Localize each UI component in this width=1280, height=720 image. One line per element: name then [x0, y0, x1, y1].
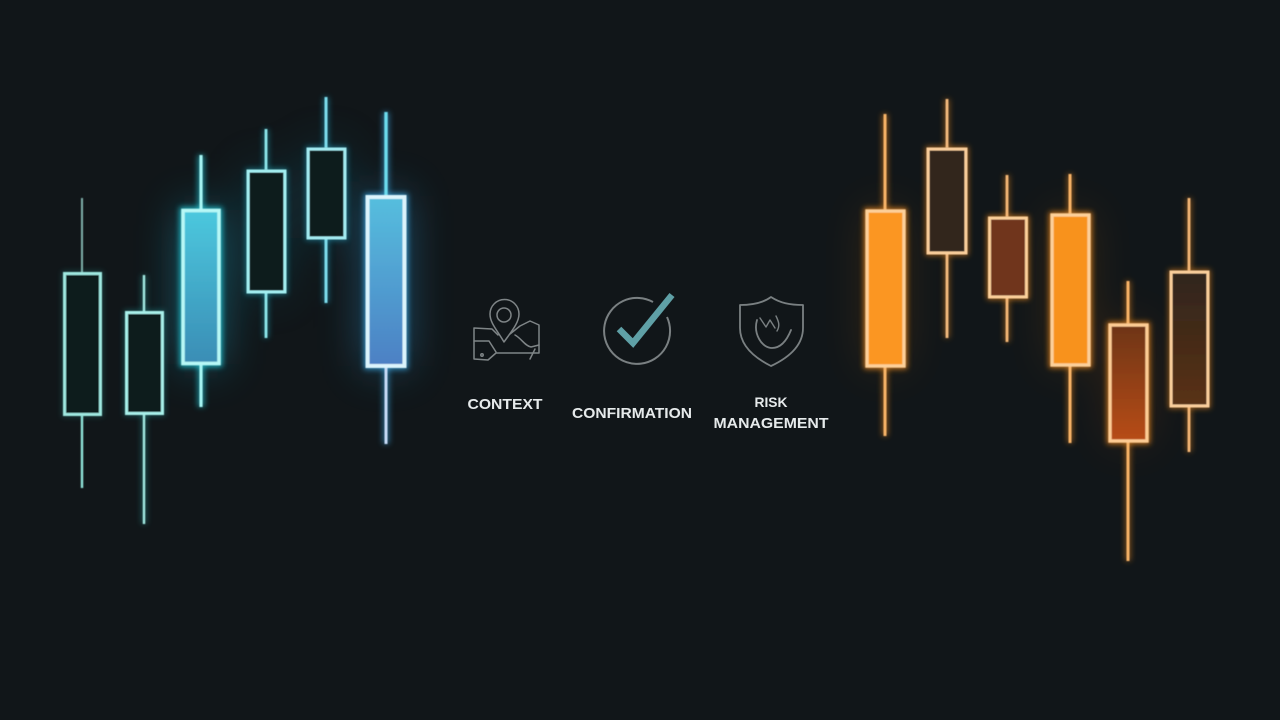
candle 2	[126, 275, 162, 524]
candle 6	[1171, 198, 1208, 452]
label: risk management: RISK	[754, 394, 788, 410]
candle 4	[248, 129, 285, 338]
label: confirmation: CONFIRMATION	[572, 405, 692, 422]
icon: shield	[740, 297, 803, 366]
candle 1	[867, 114, 904, 436]
label: context: CONTEXT	[468, 396, 542, 413]
label: risk management	[714, 394, 828, 432]
candle 5	[1110, 281, 1147, 561]
icon: check mark in circle	[604, 295, 672, 364]
chart: falling orange candlesticks	[866, 99, 1208, 561]
candle 6	[368, 112, 404, 444]
candle 3	[183, 155, 219, 407]
ambient teal glow	[182, 148, 405, 366]
chart: rising teal candlesticks	[64, 97, 405, 524]
candle 1	[64, 198, 100, 488]
candle 4	[1052, 174, 1089, 443]
ambient orange glow	[866, 210, 1148, 441]
candle 5	[308, 97, 345, 303]
candle 3	[990, 175, 1026, 342]
candle 2	[928, 99, 966, 338]
icon: map with location pin	[474, 300, 539, 360]
label: risk management: MANAGEMENT	[714, 415, 828, 432]
